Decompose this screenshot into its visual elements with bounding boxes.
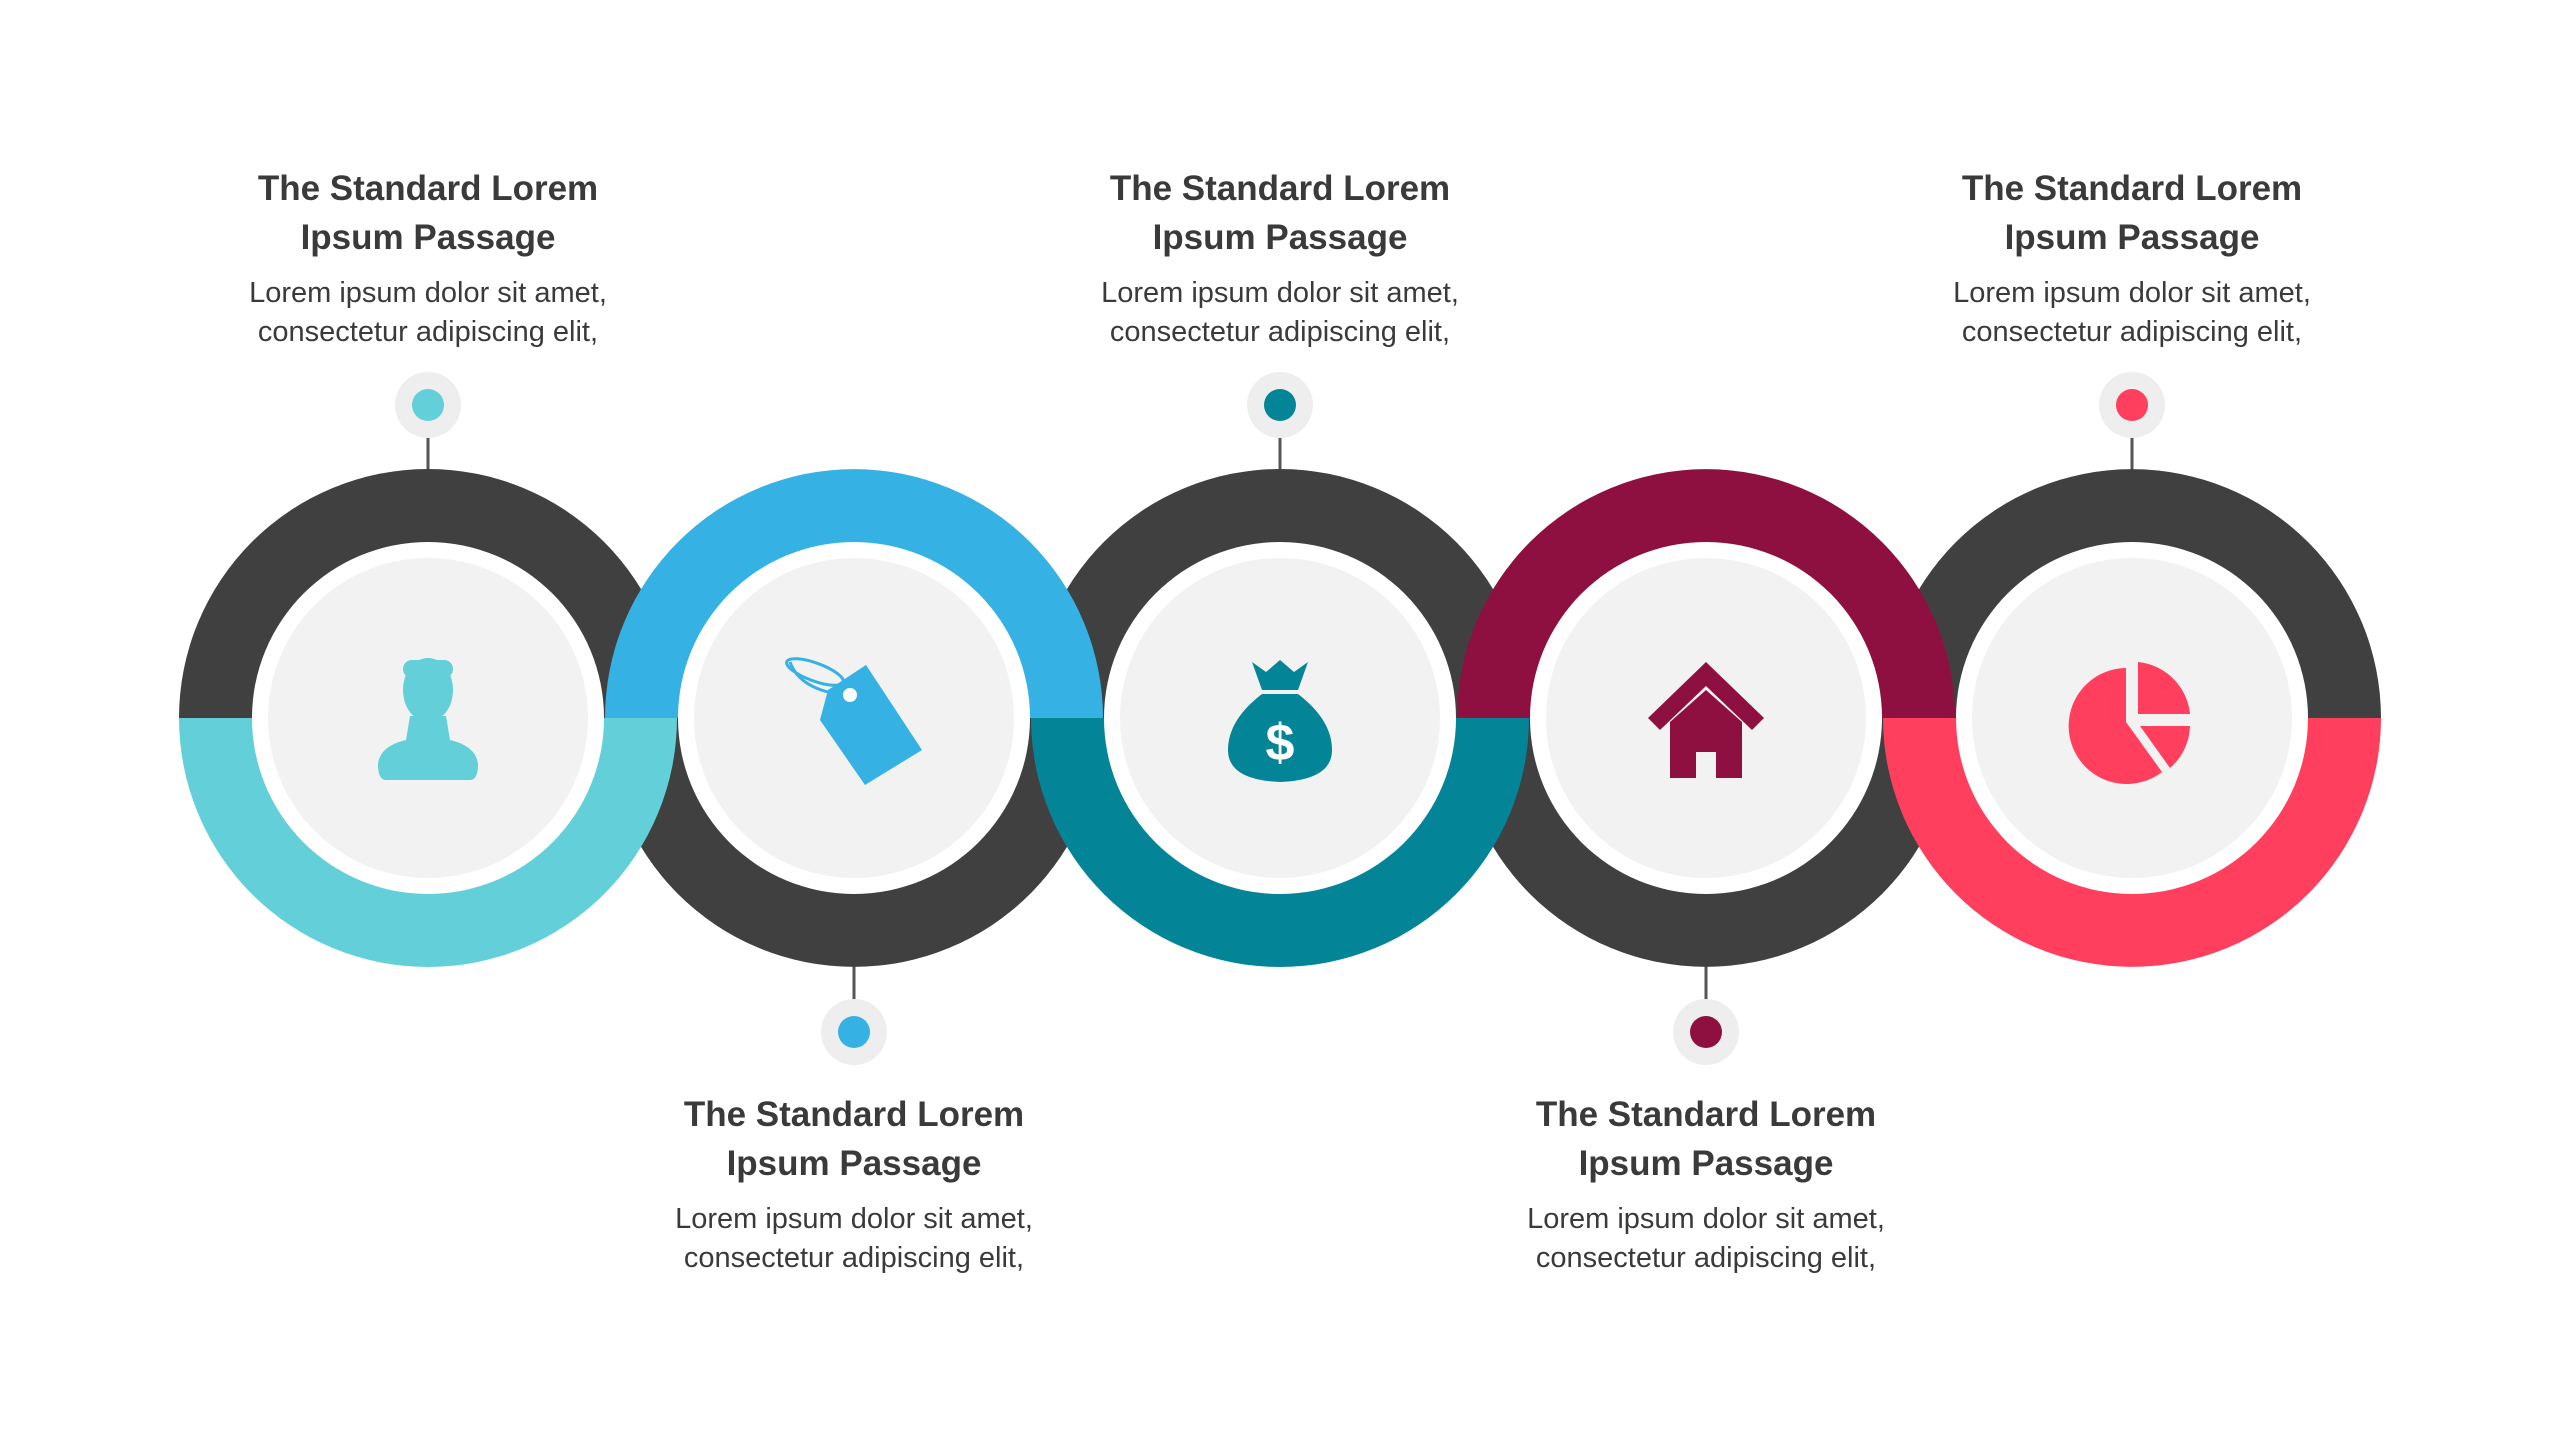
icon: house [1648,662,1764,778]
text blocks: The Standard Lorem [1962,169,2302,208]
inner discs [252,542,2308,894]
text blocks [249,169,2311,1274]
text blocks: Ipsum Passage [1153,218,1407,257]
text blocks: The Standard Lorem [684,1095,1024,1134]
icon: money bag [1228,660,1332,782]
text blocks: The Standard Lorem [1536,1095,1876,1134]
text blocks: Lorem ipsum dolor sit amet, [249,277,607,309]
text blocks: Ipsum Passage [1579,1144,1833,1183]
text blocks: Lorem ipsum dolor sit amet, [1101,277,1459,309]
text blocks: The Standard Lorem [258,169,598,208]
text blocks: consectetur adipiscing elit, [1536,1242,1876,1274]
text blocks: consectetur adipiscing elit, [258,316,598,348]
icon: tag [784,653,922,785]
dark ring halves [179,469,2381,967]
dots [395,372,2165,1065]
icon: person [378,658,478,780]
icon: money bag: $ [1266,714,1295,772]
text blocks: Ipsum Passage [727,1144,981,1183]
icon: pie chart [2069,662,2190,784]
text blocks: Ipsum Passage [2005,218,2259,257]
text blocks: consectetur adipiscing elit, [684,1242,1024,1274]
text blocks: Lorem ipsum dolor sit amet, [1527,1203,1885,1235]
colored ring halves [179,469,2381,967]
text blocks: The Standard Lorem [1110,169,1450,208]
text blocks: Ipsum Passage [301,218,555,257]
connectors [428,405,2132,1032]
text blocks: consectetur adipiscing elit, [1962,316,2302,348]
text blocks: Lorem ipsum dolor sit amet, [1953,277,2311,309]
text blocks: Lorem ipsum dolor sit amet, [675,1203,1033,1235]
text blocks: consectetur adipiscing elit, [1110,316,1450,348]
